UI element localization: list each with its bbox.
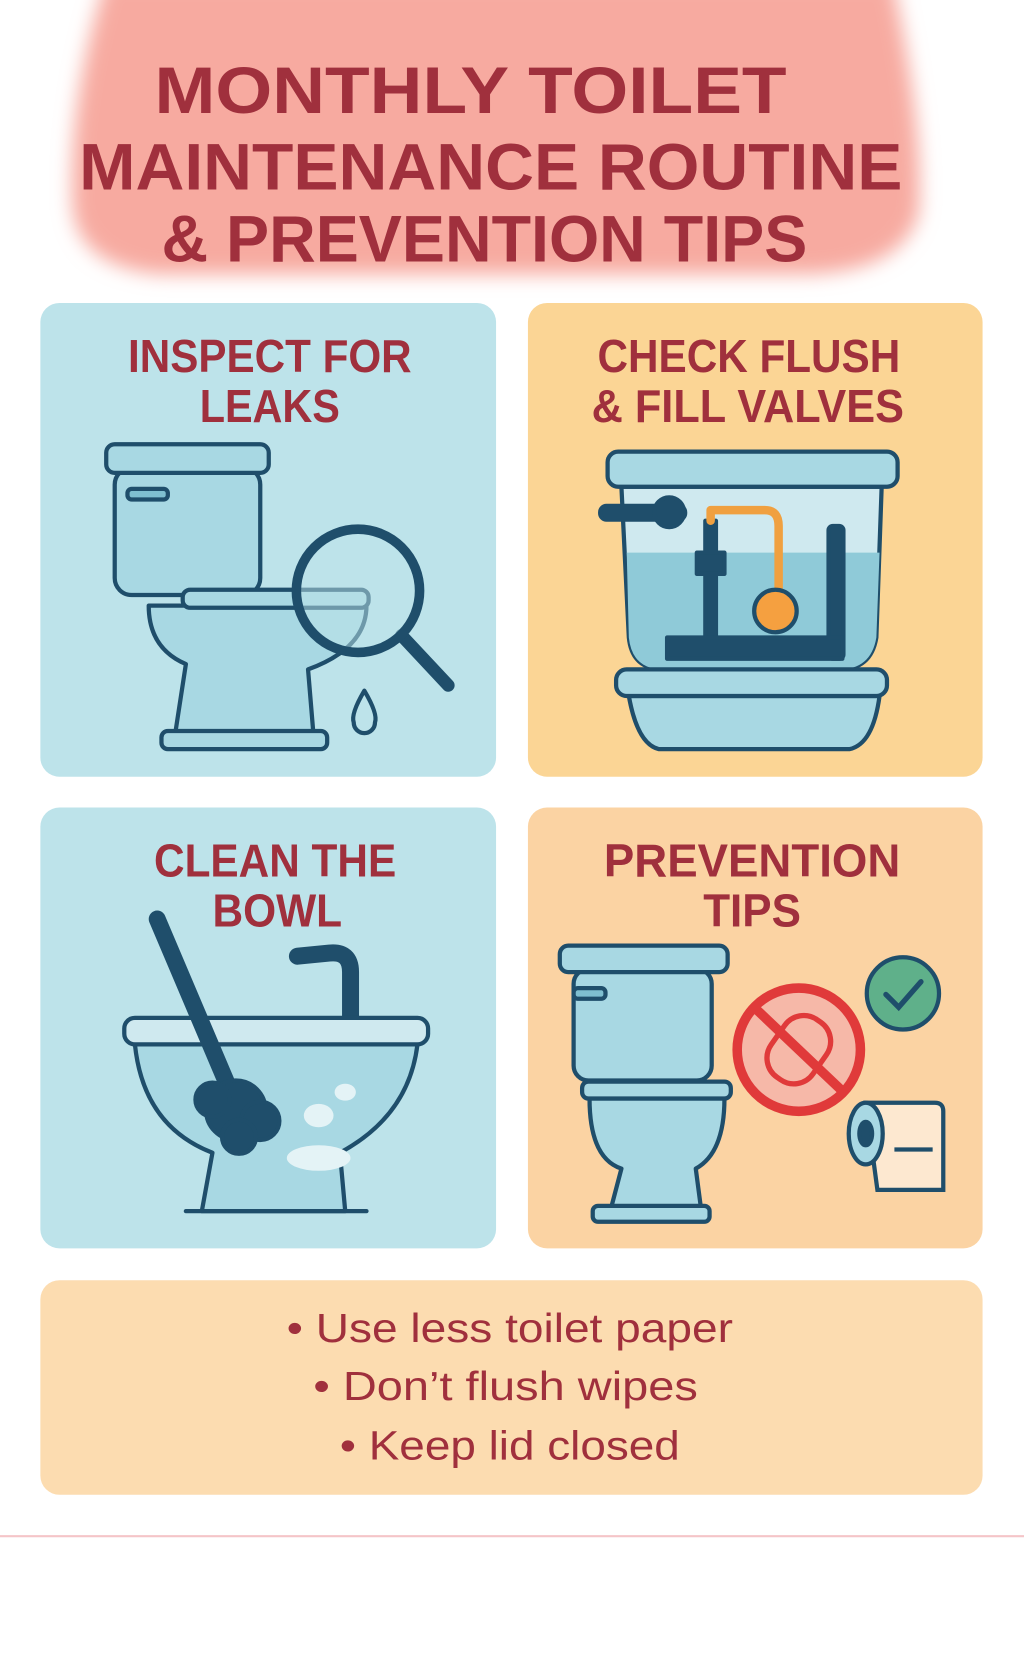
icon: small toilet [560, 946, 731, 1222]
title banner: MONTHLY TOILET [155, 53, 787, 127]
panel: check flush & fill valves: & FILL VALVES [592, 380, 904, 432]
icon: no wipes sign [737, 988, 860, 1111]
panel: clean the bowl: CLEAN THE [154, 835, 396, 887]
bullet list box: • Use less toilet paper [287, 1305, 733, 1351]
icon: toilet with magnifier [106, 444, 448, 749]
bullet list box: • Don’t flush wipes [313, 1363, 698, 1409]
title banner: & PREVENTION TIPS [161, 202, 807, 276]
icon: check mark [867, 957, 939, 1030]
bullet list box: • Keep lid closed [340, 1423, 680, 1469]
title banner [72, 0, 920, 276]
panel: prevention tips [528, 808, 983, 1248]
icon: bowl with brush [124, 919, 428, 1211]
panel: clean the bowl: BOWL [212, 884, 342, 936]
bullet list box [40, 1280, 983, 1495]
title banner: MAINTENANCE ROUTINE [79, 129, 902, 203]
panel: inspect for leaks: INSPECT FOR [128, 330, 412, 382]
panel: inspect for leaks [40, 303, 496, 777]
panel: prevention tips: PREVENTION [604, 835, 900, 887]
panel: check flush & fill valves [528, 303, 983, 777]
panel: prevention tips: TIPS [703, 884, 801, 936]
icon: toilet tank internals [600, 452, 898, 749]
panel: check flush & fill valves: CHECK FLUSH [598, 330, 900, 382]
icon: toilet paper roll [849, 1103, 943, 1190]
panel: clean the bowl [40, 808, 496, 1248]
panel: inspect for leaks: LEAKS [200, 380, 340, 432]
